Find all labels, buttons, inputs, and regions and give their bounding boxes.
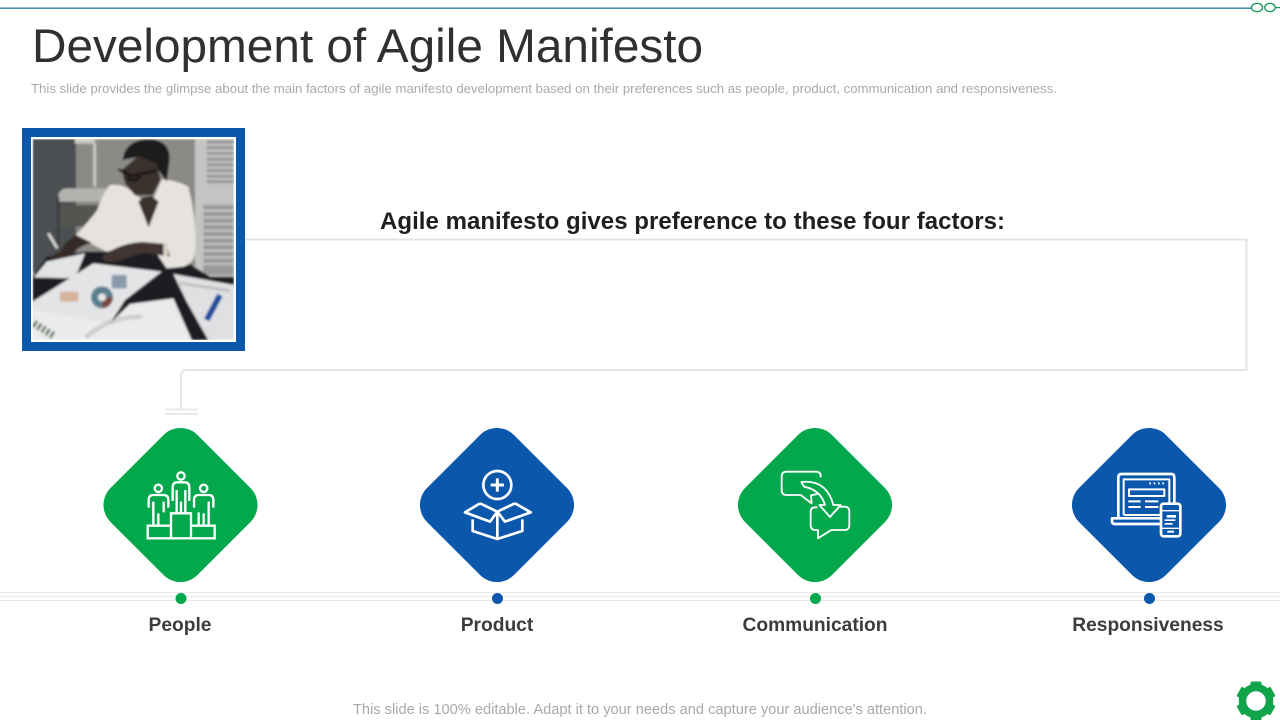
photo frame (22, 128, 245, 351)
factor: People (94, 418, 267, 636)
factor: Communication (728, 418, 902, 636)
note and pen (34, 253, 85, 278)
head (123, 139, 170, 182)
top rule with linked rings (0, 3, 1280, 12)
label: Responsiveness: Responsiveness (1072, 615, 1224, 636)
diamond: product (410, 418, 584, 592)
label: Product: Product (461, 615, 534, 636)
diamond: responsiveness (1062, 418, 1236, 592)
icon: box with plus (465, 471, 531, 539)
side table (58, 188, 107, 202)
heading: Agile manifesto gives preference to these four factors: (380, 208, 1005, 235)
icon: podium with people (148, 472, 215, 538)
footer note: This slide is 100% editable. Adapt it to your needs and capture your audience's attention. (353, 702, 927, 718)
diamond: communication (728, 418, 902, 592)
connector frame from photo to factors (165, 240, 1246, 414)
timeline lines (0, 592, 1280, 601)
title: Development of Agile Manifesto (32, 19, 703, 72)
papers (33, 263, 162, 323)
desk (33, 252, 234, 340)
factor: Product (410, 418, 584, 636)
subtitle: This slide provides the glimpse about the main factors of agile manifesto development based on their preferences such as people, product, communication and responsiveness. (31, 82, 1057, 96)
dot: product (492, 593, 503, 604)
diamond: people (94, 418, 267, 592)
label: Communication: Communication (743, 615, 887, 636)
dot: responsiveness (1144, 593, 1155, 604)
blouse (76, 179, 196, 268)
icon: laptop and phone (1112, 474, 1180, 536)
label: People: People (149, 615, 212, 636)
photo: woman working at a desk (33, 139, 234, 340)
dot: communication (810, 593, 821, 604)
dot: people (176, 593, 186, 604)
factor: Responsiveness (1062, 418, 1236, 636)
icon: speech bubbles with arrow (782, 472, 849, 538)
icon: gear (1236, 682, 1276, 720)
arms (50, 234, 92, 260)
